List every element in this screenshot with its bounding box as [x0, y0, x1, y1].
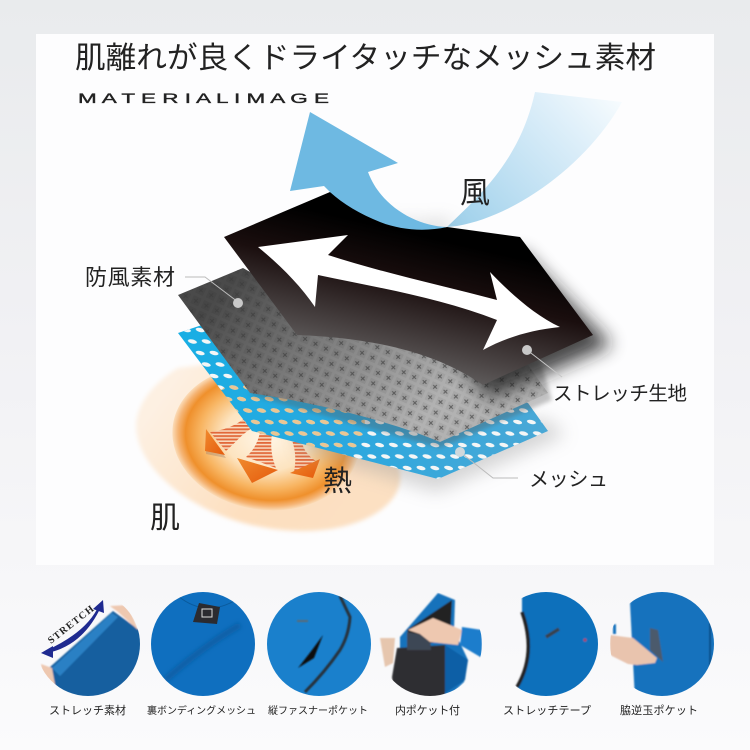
feature: side pocket	[610, 590, 720, 717]
feature: bonded mesh: 裏ボンディングメッシュ	[147, 704, 256, 717]
heat glow	[163, 354, 369, 522]
panel: material image	[36, 34, 714, 565]
feature: vertical zip pocket: 縦ファスナーポケット	[268, 704, 368, 717]
stretch double arrow	[258, 235, 560, 350]
heat label: 熱	[323, 465, 352, 498]
callout: mesh: メッシュ	[529, 469, 608, 491]
subtitle: M A T E R I A L I M A G E	[78, 90, 329, 106]
wind label: 風	[460, 177, 490, 210]
feature: stretch tape: ストレッチテープ	[503, 704, 591, 717]
title: 肌離れが良くドライタッチなメッシュ素材	[75, 42, 656, 75]
heat arrow centre	[237, 432, 278, 483]
skin label: 肌	[150, 502, 180, 535]
mesh shadow	[300, 420, 565, 492]
wind arrow	[290, 112, 447, 230]
mesh holes	[178, 325, 548, 479]
fabric shadow	[450, 250, 612, 398]
layer: mesh	[178, 325, 565, 492]
callout: mesh	[455, 447, 608, 491]
layer: windproof film	[178, 268, 552, 448]
mesh holes tinted by heat	[222, 385, 365, 456]
callout: stretch fabric: ストレッチ生地	[553, 383, 687, 405]
film pattern	[178, 268, 548, 442]
skin blob	[136, 360, 400, 531]
skin heat area	[136, 354, 400, 531]
film sheet	[178, 268, 548, 442]
feature: stretch material: STRETCH	[46, 604, 96, 646]
feature: side pocket: 脇逆玉ポケット	[620, 703, 698, 717]
mesh fabric	[178, 325, 548, 479]
callout: stretch fabric	[522, 345, 687, 405]
feature: stretch material: ストレッチ素材	[49, 703, 126, 717]
heat arrow left	[205, 418, 252, 458]
feature: vertical zip pocket	[267, 592, 371, 717]
breeze stream	[447, 92, 622, 227]
feature: stretch tape	[503, 590, 600, 717]
top shadow	[340, 200, 450, 235]
callout: windproof: 防風素材	[85, 265, 175, 290]
feature: inner pocket	[380, 593, 482, 717]
feature: stretch material	[41, 600, 142, 717]
heat arrow right	[290, 440, 320, 478]
fabric sheet	[224, 192, 593, 385]
feature: inner pocket: 内ポケット付	[395, 703, 460, 717]
callout: windproof	[85, 265, 243, 308]
layer: stretch fabric	[224, 192, 612, 398]
feature: bonded mesh	[147, 592, 256, 717]
film shadow	[250, 330, 552, 448]
